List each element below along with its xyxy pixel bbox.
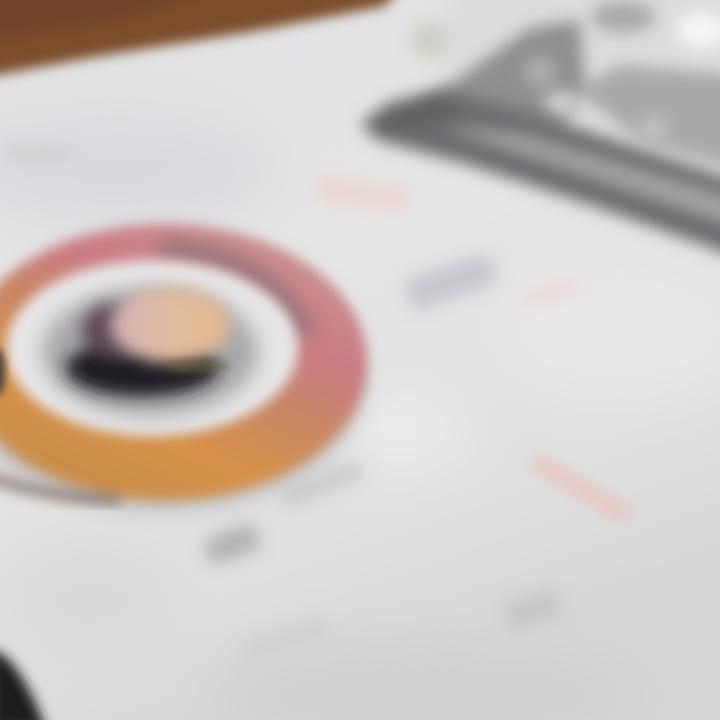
device: pale surround <box>440 0 720 180</box>
faint grey text marks <box>0 145 563 663</box>
donut: peach dome <box>110 287 230 363</box>
red text mark <box>528 453 633 524</box>
donut: grey halo <box>42 288 258 416</box>
donut: soft shadow <box>0 254 364 510</box>
small object at top centre <box>410 22 450 58</box>
donut: dark lower rim <box>0 476 120 500</box>
device: grey keyboard <box>420 1 720 170</box>
donut: dome olive edge <box>166 360 230 372</box>
donut: coloured ring <box>0 224 367 500</box>
device in top right <box>360 0 720 258</box>
device: highlights <box>524 12 720 138</box>
donut: dark centre <box>66 304 218 396</box>
donut: pale inner ring <box>6 260 298 436</box>
device: dark edge <box>360 90 720 258</box>
faint red text marks <box>314 177 581 309</box>
donut: left dark tip <box>0 348 5 396</box>
donut: inner mauve shade <box>160 250 306 335</box>
donut chart <box>0 224 367 510</box>
black object in bottom-left corner <box>0 650 46 720</box>
wooden table corner <box>0 0 405 78</box>
